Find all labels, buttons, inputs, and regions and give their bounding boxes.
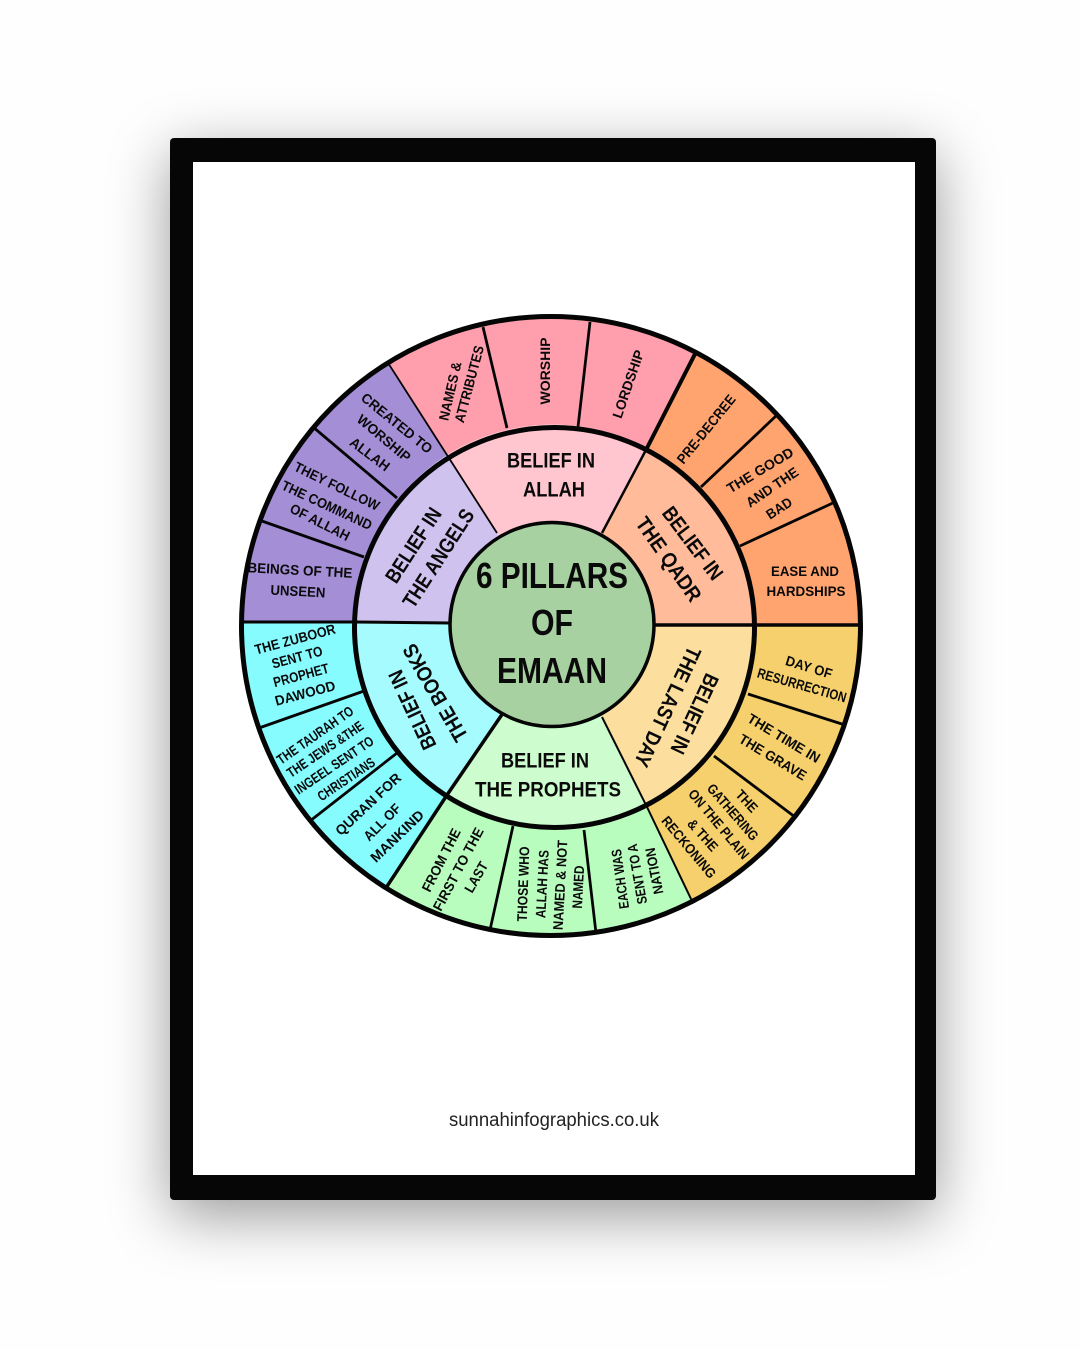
item: those who Allah has named and not named: NAMED <box>569 865 587 909</box>
title: 6 pillars of emaan: EMAAN <box>497 650 607 691</box>
item: from the first to the last: FROM THE <box>418 826 464 894</box>
item: they follow the command of Allah: THEY FOLLOW <box>292 458 383 514</box>
item: ease and hardships <box>766 563 846 599</box>
heading: belief in the last day: BELIEF IN <box>665 670 723 757</box>
inner wedge: last day <box>552 625 755 807</box>
item: the gathering and reckoning: RECKONING <box>658 813 720 881</box>
heading: belief in the Qadr: BELIEF IN <box>657 502 727 585</box>
pillar: belief in the last day <box>552 625 860 901</box>
item: names and attributes <box>435 344 487 424</box>
item: ease and hardships: EASE AND <box>771 563 839 579</box>
heading: belief in the angels: BELIEF IN <box>381 504 447 587</box>
heading: belief in the books: BELIEF IN <box>385 666 441 753</box>
item: Quran for all of mankind: QURAN FOR <box>332 770 404 839</box>
heading: belief in the prophets: BELIEF IN <box>501 750 589 773</box>
item: the Taurah and Ingeel: CHRISTIANS <box>314 754 378 804</box>
inner wedge: angels <box>355 455 552 625</box>
item: the Taurah and Ingeel: THE JEWS &THE <box>284 718 366 781</box>
item: from the first to the last: FIRST TO THE <box>429 825 487 913</box>
item: worship: WORSHIP <box>537 338 553 404</box>
item: created to worship Allah: WORSHIP <box>354 411 414 465</box>
item: each was sent to a nation: EACH WAS <box>608 848 632 910</box>
item: each was sent to a nation: NATION <box>642 846 666 896</box>
item: the good and the bad: THE GOOD <box>724 444 796 496</box>
heading: belief in the books: THE BOOKS <box>399 640 473 745</box>
item: the gathering and reckoning: THE <box>733 786 761 816</box>
pillar: belief in the prophets <box>386 625 692 935</box>
title: 6 pillars of emaan: 6 PILLARS <box>476 555 628 596</box>
item: the good and the bad <box>724 444 801 522</box>
outer band: Qadr <box>647 353 860 626</box>
heading: belief in the Qadr: THE QADR <box>631 513 706 606</box>
item: the Taurah and Ingeel: INGEEL SENT TO <box>291 733 377 797</box>
pillar: belief in the books <box>242 621 552 887</box>
pillar: belief in the angels <box>242 363 552 625</box>
inner wedge: prophets <box>447 625 647 828</box>
item: they follow the command of Allah: OF ALLAH <box>287 500 353 544</box>
heading: belief in the prophets: THE PROPHETS <box>475 779 621 802</box>
pillar: belief in Allah <box>388 317 696 625</box>
item: the good and the bad: BAD <box>763 494 795 522</box>
pillar: belief in the Qadr <box>552 353 860 626</box>
inner wedge: books <box>355 622 552 795</box>
heading: belief in the angels: THE ANGELS <box>398 505 479 612</box>
website credit: sunnahinfographics.co.uk <box>449 1110 659 1131</box>
heading: belief in Allah <box>507 450 595 502</box>
item: the Taurah and Ingeel: THE TAURAH TO <box>274 703 357 767</box>
outer band: last day <box>647 626 860 901</box>
item: pre-decree: PRE-DECREE <box>673 391 739 467</box>
item: created to worship Allah: CREATED TO <box>358 389 436 457</box>
item: Quran for all of mankind <box>332 770 427 865</box>
heading: belief in Allah: BELIEF IN <box>507 450 595 473</box>
item: from the first to the last: LAST <box>461 858 491 895</box>
title: 6 pillars of emaan <box>476 555 628 691</box>
item: day of resurrection: RESURRECTION <box>756 665 848 705</box>
item: the gathering and reckoning <box>658 780 762 881</box>
item: the Zuboor sent to Prophet Dawood: PROPHET <box>271 660 331 690</box>
item: beings of the unseen: UNSEEN <box>270 582 326 600</box>
item: those who Allah has named and not named <box>514 839 587 930</box>
item: the good and the bad: AND THE <box>743 464 801 510</box>
heading: belief in the prophets <box>475 750 621 802</box>
item: each was sent to a nation <box>608 843 666 910</box>
heading: belief in the angels <box>381 504 479 612</box>
item: Quran for all of mankind: ALL OF <box>360 800 404 844</box>
item: names and attributes: NAMES & <box>435 360 465 422</box>
item: day of resurrection: DAY OF <box>784 652 835 682</box>
inner wedge: Qadr <box>552 448 755 626</box>
item: the Zuboor sent to Prophet Dawood: SENT TO <box>270 643 324 671</box>
item: the Zuboor sent to Prophet Dawood <box>253 621 337 709</box>
item: day of resurrection <box>756 652 848 705</box>
item: ease and hardships: HARDSHIPS <box>766 583 846 599</box>
item: those who Allah has named and not named: NAMED & NOT <box>550 839 570 930</box>
item: Quran for all of mankind: MANKIND <box>367 807 427 865</box>
outer band: Allah <box>388 317 696 455</box>
item: they follow the command of Allah <box>279 458 383 544</box>
item: created to worship Allah <box>347 389 436 474</box>
item: the gathering and reckoning: & THE <box>684 816 722 854</box>
outer band: prophets <box>386 795 692 935</box>
inner wedge: Allah <box>447 425 647 625</box>
item: the Taurah and Ingeel <box>274 703 378 804</box>
poster frame <box>170 138 936 1200</box>
item: created to worship Allah: ALLAH <box>347 434 393 474</box>
title: 6 pillars of emaan: OF <box>531 602 573 643</box>
outer band: angels <box>242 363 447 622</box>
heading: belief in Allah: ALLAH <box>523 479 585 502</box>
item: those who Allah has named and not named: THOSE WHO <box>514 846 532 922</box>
outer band: books <box>242 622 447 887</box>
item: they follow the command of Allah: THE COMMAND <box>279 477 375 533</box>
item: the gathering and reckoning: ON THE PLAIN <box>685 786 753 862</box>
item: beings of the unseen <box>247 559 353 600</box>
heading: belief in the last day: THE LAST DAY <box>629 643 705 770</box>
item: each was sent to a nation: SENT TO A <box>624 843 650 905</box>
item: the time in the grave: THE TIME IN <box>745 710 823 766</box>
item: the gathering and reckoning: GATHERING <box>704 780 762 844</box>
item: the Zuboor sent to Prophet Dawood: DAWOOD <box>273 677 337 709</box>
item: those who Allah has named and not named: ALLAH HAS <box>532 850 552 918</box>
item: the time in the grave: THE GRAVE <box>736 731 810 783</box>
centre circle <box>450 522 654 726</box>
item: the Zuboor sent to Prophet Dawood: THE ZUBOOR <box>253 621 337 658</box>
item: the time in the grave <box>736 710 823 783</box>
item: lordship: LORDSHIP <box>609 348 647 420</box>
heading: belief in the last day <box>629 643 723 770</box>
item: names and attributes: ATTRIBUTES <box>451 344 487 424</box>
item: beings of the unseen: BEINGS OF THE <box>247 559 353 581</box>
